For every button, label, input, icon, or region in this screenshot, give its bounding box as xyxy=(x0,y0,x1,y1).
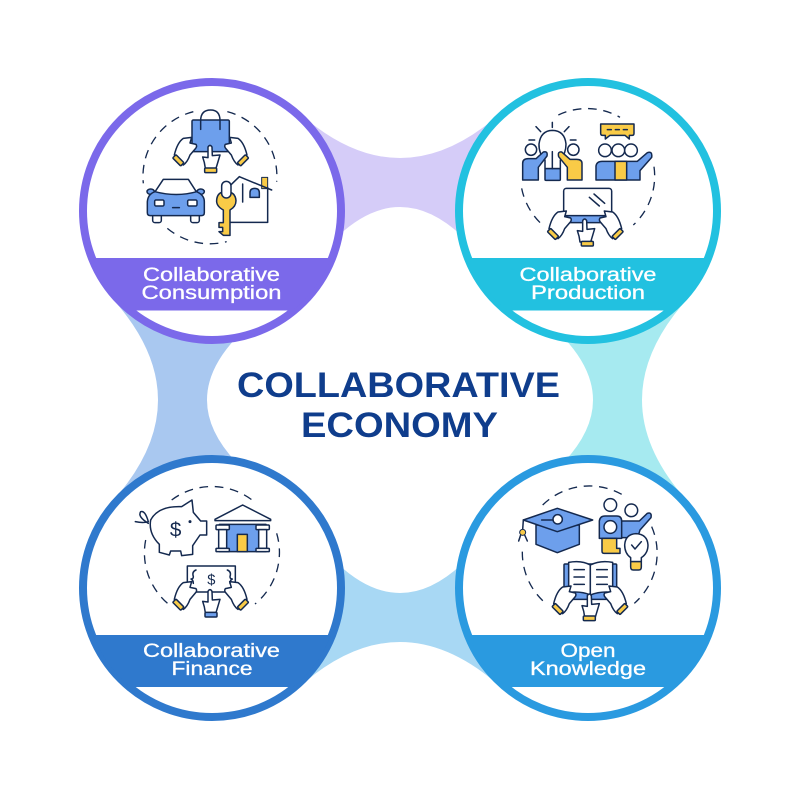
panel: collaborative consumption xyxy=(79,82,345,340)
icon: consumption xyxy=(143,110,277,244)
panel: collaborative production xyxy=(455,82,721,340)
icon: finance xyxy=(135,487,279,617)
panel: open knowledge xyxy=(455,459,721,717)
label: consumption: Consumption xyxy=(142,283,282,304)
label: finance: Finance xyxy=(172,659,252,680)
title: ECONOMY xyxy=(301,406,498,445)
icon text: piggy dollar: $ xyxy=(170,518,182,541)
label: production xyxy=(520,265,656,304)
banner: consumption xyxy=(96,258,328,310)
label: production: Production xyxy=(531,283,645,304)
connector: right teal xyxy=(564,305,682,495)
banner: production xyxy=(472,258,704,310)
label: finance: Collaborative xyxy=(143,641,280,662)
connector: bottom light blue xyxy=(305,564,495,682)
label: finance xyxy=(143,641,280,680)
label: knowledge: Knowledge xyxy=(530,659,646,680)
label: knowledge: Open xyxy=(560,641,616,662)
banner: finance xyxy=(96,635,328,687)
label: knowledge xyxy=(530,641,646,680)
title xyxy=(237,366,560,445)
connector: top purple xyxy=(305,118,495,236)
title: COLLABORATIVE xyxy=(237,366,560,405)
banner: knowledge xyxy=(472,635,704,687)
label: consumption xyxy=(142,265,282,304)
icon text: bill dollar: $ xyxy=(207,572,215,588)
icon: knowledge xyxy=(519,486,657,621)
label: production: Collaborative xyxy=(520,265,656,286)
panel: collaborative finance xyxy=(79,459,345,717)
label: consumption: Collaborative xyxy=(143,265,280,286)
icon: production xyxy=(522,109,655,246)
connector: left blue xyxy=(118,305,236,495)
